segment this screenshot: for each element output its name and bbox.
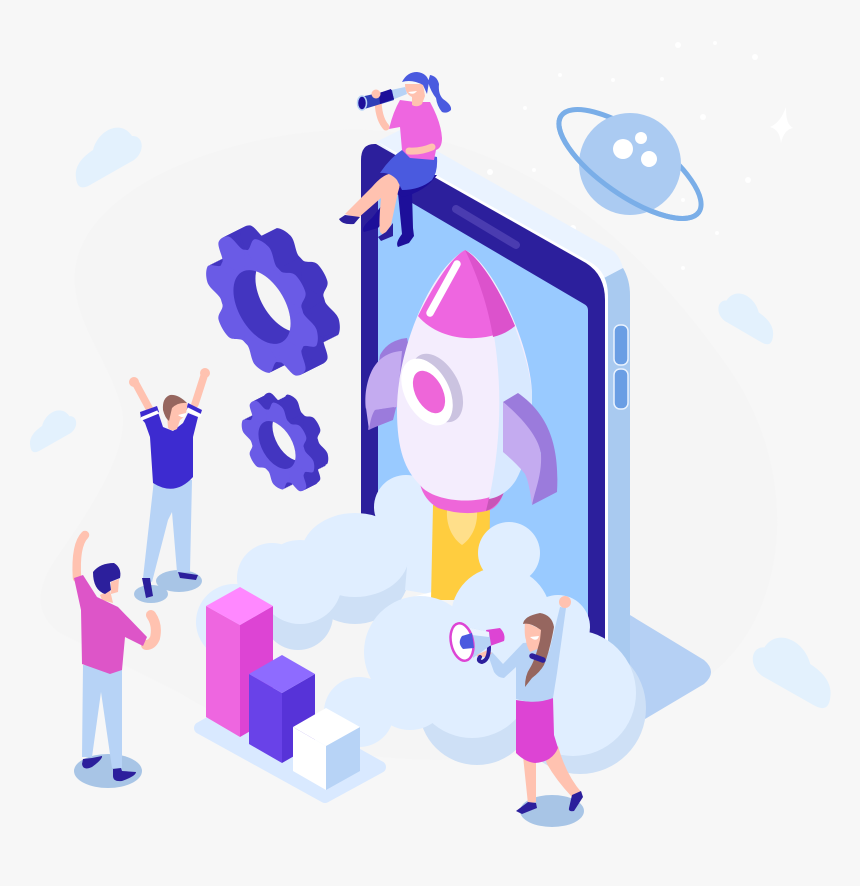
forearm (409, 147, 432, 151)
illustration: rocket launching from phone (30, 72, 830, 827)
stars (487, 41, 793, 270)
neck (100, 590, 113, 603)
megaphone (447, 621, 504, 663)
shadows (134, 585, 168, 603)
lower arm (146, 615, 156, 645)
phone speaker (456, 209, 516, 245)
torso and raised arm (488, 607, 566, 702)
background blob (41, 130, 777, 760)
hair tie (532, 656, 543, 660)
ponytail (428, 75, 451, 113)
gear inner wall (258, 413, 296, 477)
smile (408, 91, 417, 94)
hair (402, 72, 429, 94)
icon: cloud lower right (753, 638, 831, 708)
skirt (380, 150, 437, 190)
white gap under flame (400, 592, 440, 610)
man with both arms raised (129, 368, 210, 603)
man waving (74, 535, 156, 788)
seat shadow (395, 175, 437, 197)
phone side panel (604, 268, 630, 665)
neck and face (167, 398, 187, 430)
left fin (365, 338, 410, 430)
gear face (242, 383, 314, 509)
smoke cloud right (324, 522, 646, 774)
rocket body (397, 250, 532, 501)
ear (111, 579, 119, 594)
far shoe (363, 205, 383, 232)
far leg (397, 192, 414, 247)
shoes (516, 791, 583, 814)
heels (339, 215, 393, 241)
telescope (358, 87, 407, 110)
shirt (74, 575, 147, 674)
pink bar (206, 587, 273, 737)
phone white edge (378, 142, 608, 660)
arm (378, 98, 386, 127)
gear face (206, 209, 318, 403)
phone top face (376, 130, 623, 280)
icon: planet with ring (543, 90, 717, 238)
gear small (242, 392, 328, 492)
shadow (520, 795, 584, 827)
bar chart (200, 587, 380, 797)
hand and grip (476, 650, 492, 657)
face and neck (525, 622, 542, 652)
smile (178, 413, 186, 417)
sleeve bands (140, 403, 202, 418)
phone screen (378, 183, 588, 660)
gear side (208, 198, 340, 402)
gear side (244, 375, 328, 508)
smoke cloud left (196, 475, 440, 660)
right fin (503, 393, 557, 505)
woman with megaphone (447, 596, 584, 827)
phone side buttons (614, 325, 628, 409)
icon: cloud mid right (718, 293, 773, 344)
hair (93, 563, 120, 594)
rocket collar (420, 484, 505, 513)
sleeve stripes (141, 409, 201, 419)
phone (361, 130, 630, 665)
shoes (142, 572, 198, 598)
shoes (82, 756, 136, 781)
legs (143, 480, 192, 582)
shirt (140, 412, 198, 489)
shadow (74, 754, 142, 788)
icon: cloud mid left (30, 410, 76, 452)
cloud light (196, 475, 440, 660)
icon: cloud top left (76, 128, 142, 187)
phone frame (361, 144, 605, 660)
top (389, 100, 442, 160)
porthole (391, 345, 474, 434)
cloud light (324, 522, 636, 756)
gear inner wall (233, 258, 291, 356)
cloud shadow (419, 642, 646, 774)
hair and braid (523, 613, 554, 687)
phone base triangle (600, 612, 711, 722)
raised arm (77, 535, 85, 578)
neck and face (405, 84, 425, 106)
purple bar (249, 655, 315, 763)
white bar (293, 708, 360, 790)
woman with telescope (339, 72, 451, 247)
gear large (206, 225, 340, 376)
arms (136, 376, 204, 408)
chart base (200, 697, 380, 797)
legs (523, 756, 536, 804)
cloud shadow (263, 516, 410, 650)
skirt (516, 698, 558, 763)
rocket body shade (489, 325, 532, 499)
rocket (365, 250, 557, 513)
raised hand (559, 596, 571, 608)
rocket nose (418, 250, 515, 338)
rocket flame (431, 505, 490, 600)
hair (163, 395, 187, 421)
hands (129, 368, 210, 387)
smile (530, 636, 539, 640)
legs (82, 665, 122, 768)
gear hole (272, 422, 296, 460)
crossed leg (345, 174, 400, 236)
gear hole (255, 271, 291, 331)
